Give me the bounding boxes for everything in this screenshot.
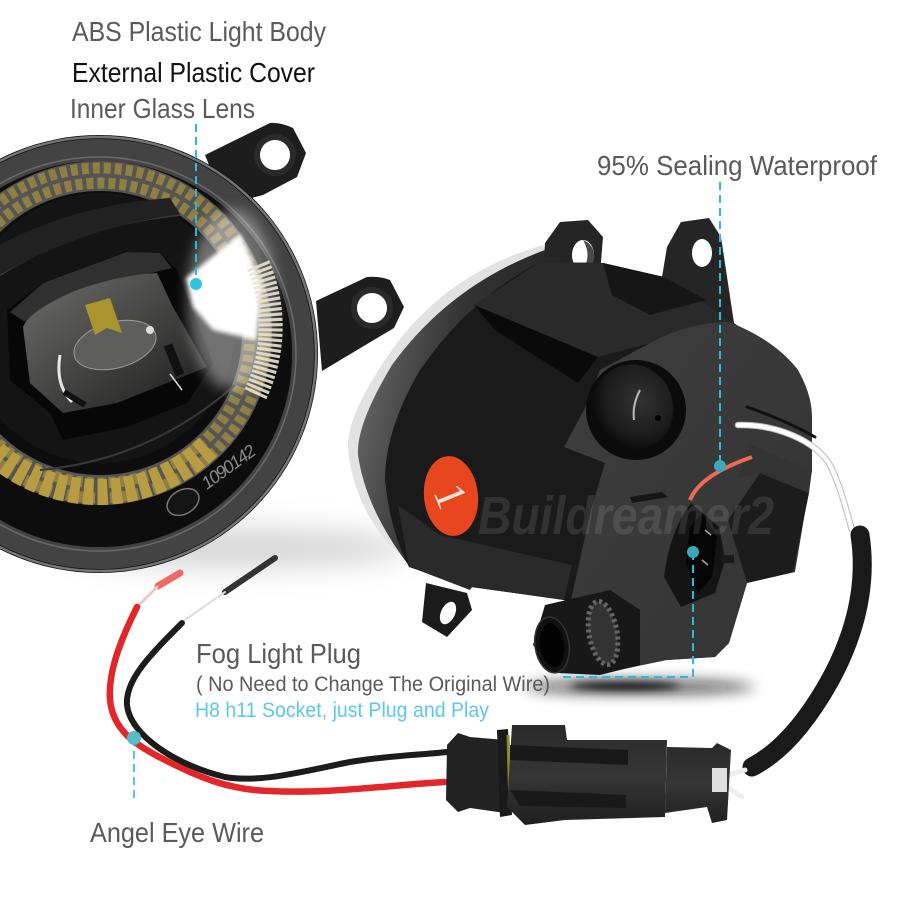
label: Inner Glass Lens: Inner Glass Lens [70,93,255,124]
soft background shadows [70,528,755,694]
yellow LED chip [85,298,122,335]
waterproof connector [446,725,731,825]
label: Angel Eye Wire: Angel Eye Wire [90,817,264,848]
inner reflector [0,193,235,463]
black angel eye wire [127,558,447,779]
label: External Plastic Cover: External Plastic Cover [72,57,315,88]
label: 95% Sealing Waterproof: 95% Sealing Waterproof [597,150,877,181]
watermark on lamp: Buildreamer2 [478,486,774,546]
outer housing [0,135,318,573]
label: no need to change the original wire: ( No Need to Change The Original Wire) [196,673,550,696]
textured rear section [564,322,812,670]
rear vent cap [586,360,686,460]
projector lens [23,273,207,413]
angel eye LED ring [0,176,257,490]
upper mounting ears [540,220,626,343]
red angel eye wire [110,573,445,792]
connector box [728,473,809,583]
red number sticker [420,453,482,539]
bright glare [186,210,276,395]
right fog lamp rear view [348,218,812,675]
right fog lamp rear view: 1 [424,477,477,516]
label: Fog Light Plug: Fog Light Plug [196,638,361,669]
white plug tails [726,770,745,797]
embossed mark: 1090142 [198,441,260,493]
adjuster gear and nozzle [533,590,640,675]
mounting ear right [316,277,404,371]
lower mounting ear [422,583,472,637]
shoulder strip [474,305,598,383]
connector socket [664,503,725,607]
label: ABS Plastic Light Body: ABS Plastic Light Body [72,16,326,47]
wiring harness [110,407,862,797]
main housing [385,262,812,660]
label: H8 h11 socket: H8 h11 Socket, just Plug and Play [195,699,489,722]
front rim [348,245,600,578]
leader lines [134,124,720,802]
black sleeve [752,535,862,767]
left fog lamp front view [0,123,404,573]
lamp wires [738,407,852,530]
mounting ear top [205,123,306,205]
leader dots [127,278,726,745]
